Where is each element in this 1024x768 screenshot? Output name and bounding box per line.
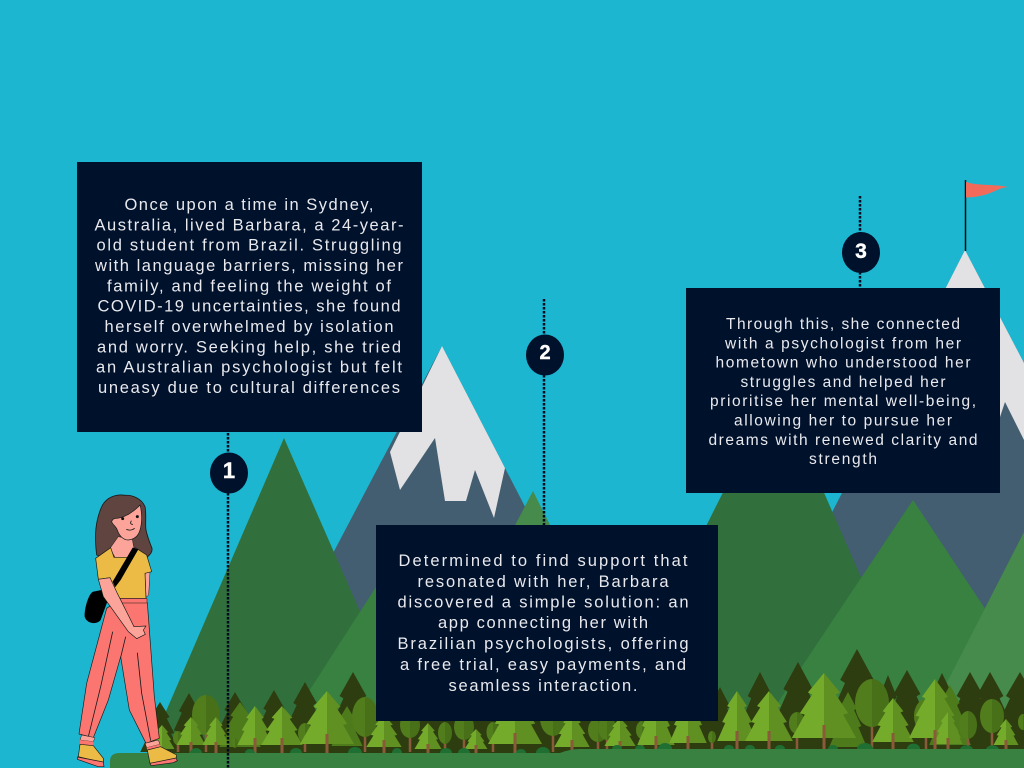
number badge 1: 1 [223, 458, 235, 483]
dark green mountain left [145, 438, 425, 760]
panel 1 text: and worry. Seeking help, she tried [97, 338, 401, 356]
panel 1 text: with language barriers, missing her [94, 257, 404, 275]
character: Barbara walking [77, 495, 177, 767]
dotted line 1 [227, 433, 229, 768]
panel 3 text: allowing her to pursue her [734, 412, 952, 430]
panel 3 text [708, 316, 978, 468]
ground [110, 749, 1024, 768]
panel 2 text: seamless interaction. [448, 677, 638, 695]
number badge 3 [842, 232, 880, 273]
slate snow mountain right [700, 250, 1024, 768]
mid-tone pine layer [219, 685, 971, 747]
right arm [145, 572, 150, 597]
neck [110, 537, 134, 557]
panel 2 text [398, 552, 688, 695]
left shoe [77, 744, 104, 767]
trousers [79, 598, 159, 743]
pine trunks [191, 725, 1006, 753]
panel 3: the outcome [686, 288, 1000, 493]
panel 2 text: resonated with her, Barbara [418, 573, 669, 591]
panel 3 text: dreams with renewed clarity and [708, 432, 978, 449]
panel 1 text: Once upon a time in Sydney, [124, 196, 374, 214]
panel 1 text: family, and feeling the weight of [107, 277, 391, 295]
facial features [121, 515, 139, 530]
socks [80, 735, 161, 751]
bushes [190, 743, 999, 753]
dotted line 3 [859, 196, 861, 288]
number badge 2: 2 [539, 342, 551, 364]
panel 1: story opening [77, 162, 422, 432]
panel 3 text: Through this, she connected [726, 316, 960, 333]
left arm [98, 578, 146, 639]
dark green mountain right [600, 385, 932, 740]
mountain range [145, 250, 1024, 768]
panel 3 text: strength [809, 451, 877, 468]
panel 1 text: uneasy due to cultural differences [98, 379, 400, 397]
panel 2: the solution [376, 525, 718, 721]
number badge 3: 3 [855, 240, 867, 263]
light green mountain right [915, 532, 1024, 745]
panel 1 text: old student from Brazil. Struggling [96, 237, 402, 255]
panel 2 text: Determined to find support that [398, 552, 688, 570]
number badge 1 [210, 452, 248, 494]
bag [85, 590, 107, 623]
panel 3 text: with a psychologist from her [724, 335, 961, 352]
bag strap [113, 548, 138, 587]
panel 2 text: Brazilian psychologists, offering [398, 635, 688, 653]
panel 2 text: app connecting her with [438, 614, 648, 632]
small light green peak [400, 491, 660, 745]
panel 3 text: prioritise her mental well-being, [710, 393, 976, 410]
panel 2 text: discovered a simple solution: an [398, 594, 688, 612]
panel 2 text: a free trial, easy payments, and [400, 656, 686, 674]
mid green mountain left [270, 534, 560, 752]
panel 1 text: COVID-19 uncertainties, she found [98, 298, 400, 316]
right shoe [147, 747, 177, 766]
panel 1 text: Australia, lived Barbara, a 24-year- [94, 216, 404, 234]
slate snow mountain left [220, 346, 660, 768]
forest [140, 649, 1024, 754]
light pine layer [150, 673, 1018, 749]
panel 1 text: an Australian psychologist but felt [96, 359, 402, 377]
flag on summit [966, 180, 1008, 251]
number badge 2 [526, 334, 564, 376]
mid green mountain right [745, 500, 1024, 752]
round trees [173, 679, 1024, 752]
dark pine layer [140, 649, 1024, 754]
panel 3 text: struggles and helped her [740, 374, 946, 391]
hair [95, 495, 152, 560]
top [96, 548, 152, 598]
dotted line 2 [543, 299, 545, 525]
panel 1 text [94, 196, 404, 397]
panel 3 text: hometown who understood her [716, 355, 970, 372]
panel 1 text: herself overwhelmed by isolation [104, 318, 394, 336]
face [112, 505, 142, 540]
